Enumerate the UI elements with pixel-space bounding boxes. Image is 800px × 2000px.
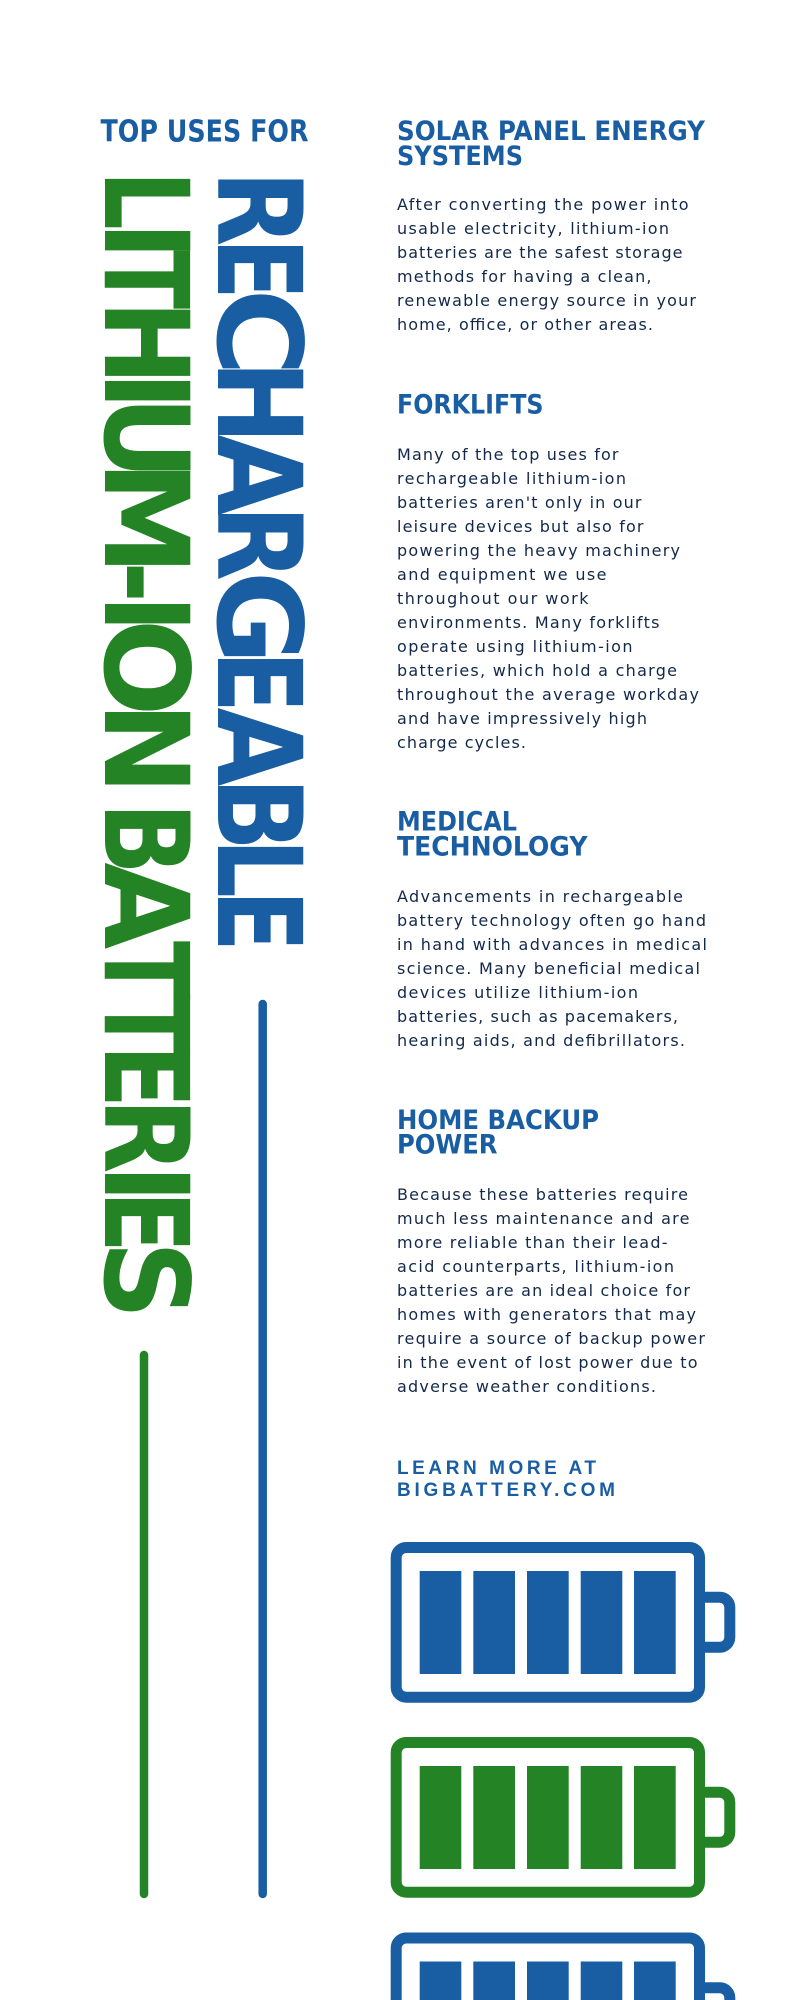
vertical title: lithium-ion batteries: - <box>74 561 208 603</box>
text block: medical body: devices utilize lithium-ion <box>397 983 638 1002</box>
vertical title: lithium-ion batteries: I <box>77 595 212 633</box>
heading: home backup power <box>397 1105 599 1160</box>
text block: solar panel body: home, office, or other areas. <box>397 315 653 334</box>
text block: forklifts body: powering the heavy machinery <box>397 541 680 560</box>
vertical title: rechargeable: R <box>190 505 325 581</box>
heading: medical technology: TECHNOLOGY <box>397 832 588 862</box>
text block: solar panel body: usable electricity, lithium-ion <box>397 219 669 238</box>
text block: medical body: hearing aids, and defibrillators. <box>397 1031 685 1050</box>
vertical title: rechargeable: G <box>190 571 325 664</box>
vertical title: lithium-ion batteries: N <box>77 702 212 795</box>
icon: green battery <box>396 1742 730 1892</box>
vertical rule: blue <box>258 1004 267 1894</box>
section: medical technology <box>397 806 707 1050</box>
text block: solar panel body: batteries are the safest storage <box>397 243 682 262</box>
vertical title: rechargeable: A <box>190 434 325 516</box>
vertical title: lithium-ion batteries: O <box>77 619 212 716</box>
vertical title: rechargeable: A <box>190 708 325 786</box>
text block: forklifts body: leisure devices but also for <box>397 517 644 536</box>
text block: medical body: in hand with advances in medical <box>397 935 707 954</box>
vertical title: lithium-ion batteries: S <box>77 1241 212 1319</box>
callout: learn more: LEARN MORE AT <box>397 1458 596 1479</box>
heading: top uses for: TOP USES FOR <box>100 114 309 150</box>
vertical title: rechargeable: E <box>190 890 325 952</box>
callout: learn more <box>397 1458 615 1501</box>
text block: home backup body: homes with generators that may <box>397 1305 696 1324</box>
text block: forklifts body: throughout the average workday <box>397 685 699 704</box>
vertical title: rechargeable: L <box>190 838 325 898</box>
vertical title: rechargeable: H <box>190 360 325 444</box>
heading: solar panel energy systems: SOLAR PANEL ENERGY <box>397 116 706 147</box>
vertical title: lithium-ion batteries: T <box>77 941 212 1000</box>
vertical title: lithium-ion batteries: R <box>77 1098 212 1174</box>
vertical title: lithium-ion batteries: I <box>77 1165 212 1203</box>
vertical title: lithium-ion batteries: I <box>77 222 212 260</box>
text block: home backup body: Because these batteries require <box>397 1185 688 1204</box>
text block: forklifts body: batteries aren't only in our <box>397 493 642 512</box>
vertical title: rechargeable: C <box>190 288 325 376</box>
heading: medical technology <box>397 806 588 862</box>
text block: home backup body: more reliable than their lead- <box>397 1233 668 1252</box>
text block: forklifts body: batteries, which hold a charge <box>397 661 677 680</box>
text block: forklifts body: operate using lithium-ion <box>397 637 632 656</box>
section: solar panel energy systems <box>397 116 706 334</box>
heading: home backup power: HOME BACKUP <box>397 1105 599 1136</box>
text block: medical body: science. Many beneficial medical <box>397 959 700 978</box>
vertical title: lithium-ion batteries: E <box>77 1044 212 1108</box>
text block: forklifts body: and equipment we use <box>397 565 606 584</box>
vertical title: lithium-ion batteries: B <box>77 802 212 875</box>
vertical title: lithium-ion batteries: I <box>77 372 212 410</box>
text block: forklifts body: rechargeable lithium-ion <box>397 469 626 488</box>
icon: blue battery 1 <box>396 1548 730 1697</box>
text block: forklifts body: throughout our work <box>397 589 589 608</box>
text block: home backup body: much less maintenance and are <box>397 1209 690 1228</box>
text block: medical body: batteries, such as pacemakers, <box>397 1007 678 1026</box>
text block: home backup body: adverse weather conditions. <box>397 1377 656 1396</box>
section: home backup power <box>397 1105 705 1396</box>
vertical rule: green <box>140 1355 148 1894</box>
text block: medical body: Advancements in rechargeable <box>397 887 683 906</box>
text block: medical body: battery technology often go hand <box>397 911 706 930</box>
vertical title: lithium-ion batteries: U <box>77 396 212 480</box>
vertical title: lithium-ion batteries: L <box>77 170 212 230</box>
text block: home backup body: acid counterparts, lithium-ion <box>397 1257 674 1276</box>
heading: solar panel energy systems <box>397 116 706 172</box>
text block: home backup body: batteries are an ideal choice for <box>397 1281 690 1300</box>
text block: solar panel body: methods for having a clean, <box>397 267 652 286</box>
vertical title: rechargeable: B <box>190 777 325 851</box>
text block: forklifts body: Many of the top uses for <box>397 445 619 464</box>
text block: solar panel body: After converting the power into <box>397 195 688 214</box>
vertical title: rechargeable: R <box>190 170 325 246</box>
vertical title: lithium-ion batteries: T <box>77 250 212 309</box>
callout: learn more: BIGBATTERY.COM <box>397 1480 615 1501</box>
heading: home backup power: POWER <box>397 1130 498 1160</box>
text block: home backup body: in the event of lost power due to <box>397 1353 698 1372</box>
section: forklifts <box>397 390 699 752</box>
vertical title: lithium-ion batteries: M <box>77 460 212 576</box>
heading: solar panel energy systems: SYSTEMS <box>397 141 523 172</box>
text block: forklifts body: charge cycles. <box>397 733 526 752</box>
vertical title: rechargeable: E <box>190 651 325 713</box>
heading: medical technology: MEDICAL <box>397 806 517 838</box>
text block: solar panel body <box>397 195 696 334</box>
vertical title: lithium-ion batteries: H <box>77 300 212 385</box>
text block: forklifts body: environments. Many forklifts <box>397 613 660 632</box>
text block: home backup body: require a source of backup power <box>397 1329 705 1348</box>
vertical title: lithium-ion batteries: E <box>77 1191 212 1253</box>
text block: medical body <box>397 887 707 1050</box>
vertical title: lithium-ion batteries: T <box>77 995 212 1054</box>
text block: home backup body <box>397 1185 705 1396</box>
text block: solar panel body: renewable energy source in your <box>397 291 696 310</box>
vertical title: rechargeable: E <box>190 238 325 300</box>
icon: blue battery 2 <box>396 1938 730 2000</box>
heading: forklifts: FORKLIFTS <box>397 390 544 420</box>
text block: forklifts body <box>397 445 699 752</box>
text block: forklifts body: and have impressively high <box>397 709 647 728</box>
vertical title: lithium-ion batteries: A <box>77 862 212 949</box>
